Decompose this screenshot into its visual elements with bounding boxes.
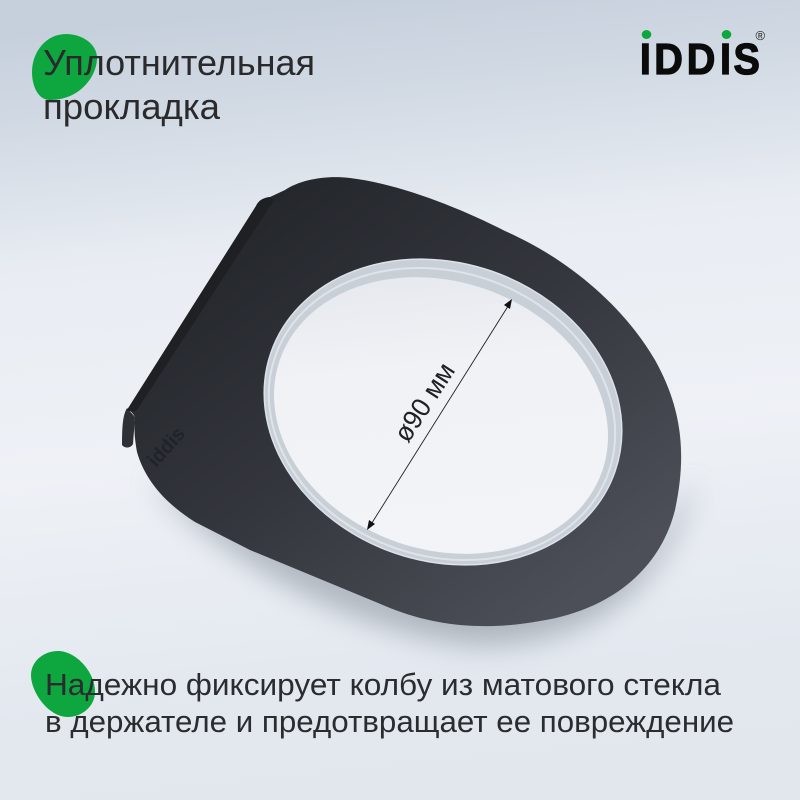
logo wordmark: IDDIS — [640, 34, 760, 83]
title: Уплотнительная — [43, 42, 315, 83]
description: Надежно фиксирует колбу из матового стекла — [45, 667, 722, 702]
logo dots — [642, 30, 731, 39]
registered mark: ® — [756, 28, 766, 43]
product: sealing gasket plate — [122, 177, 681, 626]
hook tab — [122, 408, 135, 448]
title accent blob — [32, 34, 97, 100]
description — [45, 667, 734, 739]
title: прокладка — [43, 86, 221, 127]
silicone ring — [222, 212, 664, 612]
logo imprint: iddis — [143, 423, 190, 471]
title — [43, 42, 315, 127]
plate shadow — [150, 480, 695, 645]
folded lip — [127, 197, 274, 412]
glass opening — [236, 233, 646, 598]
description accent blob — [31, 651, 95, 717]
plate body — [127, 177, 681, 626]
logo — [640, 28, 766, 83]
ring inner band — [229, 222, 655, 606]
dimension label: ø90 мм — [388, 357, 461, 447]
dimension arrow — [367, 299, 512, 530]
description: в держателе и предотвращает ее повреждение — [45, 704, 734, 739]
